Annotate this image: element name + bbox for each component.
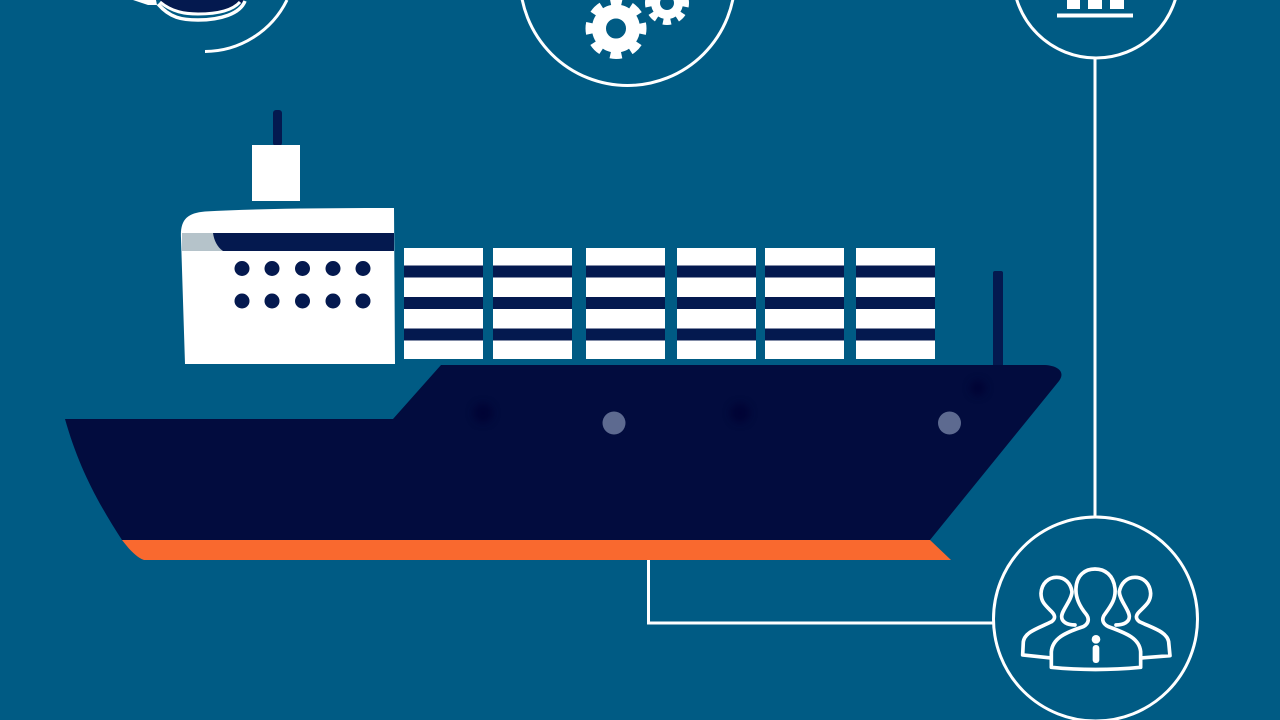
hull portholes bbox=[473, 380, 986, 434]
icon circle: bar chart bbox=[1013, 0, 1179, 58]
icon: top-left circle fragment bbox=[133, 0, 287, 52]
ring bbox=[1013, 0, 1179, 58]
icon circle: gears bbox=[520, 0, 735, 86]
connector: hull to people circle bbox=[648, 560, 994, 623]
stack 6 bbox=[856, 248, 935, 359]
hull bbox=[65, 365, 1061, 540]
left person bbox=[1023, 577, 1075, 658]
bow mast bbox=[993, 271, 1003, 367]
bowl outer outline bbox=[158, 1, 245, 20]
connector: chart circle to people circle bbox=[1094, 58, 1096, 517]
bowl inner outline bbox=[160, 2, 240, 14]
stack 3 bbox=[586, 248, 665, 359]
porthole dots bbox=[234, 261, 370, 308]
ring bbox=[520, 0, 735, 86]
gear body bbox=[656, 0, 678, 14]
small gear bbox=[649, 0, 685, 21]
stack 2 bbox=[493, 248, 572, 359]
bridge window strip, grey part bbox=[182, 233, 223, 251]
people icon bbox=[1023, 569, 1170, 669]
bridge body bbox=[181, 208, 395, 364]
center person bbox=[1051, 569, 1141, 669]
light porthole bbox=[938, 412, 961, 434]
gear teeth bbox=[590, 2, 642, 54]
icon circle: team bbox=[994, 517, 1198, 720]
left wedge bbox=[133, 0, 157, 5]
boot stripe bbox=[122, 540, 951, 560]
dark porthole shadows bbox=[473, 380, 986, 423]
bowl bbox=[160, 0, 244, 14]
gear body bbox=[599, 12, 633, 46]
aft mast bbox=[273, 110, 282, 146]
container stacks bbox=[404, 248, 935, 359]
funnel bbox=[252, 145, 300, 201]
stack 1 bbox=[404, 248, 483, 359]
gear teeth bbox=[649, 0, 685, 21]
stack 4 bbox=[677, 248, 756, 359]
arc bbox=[205, 0, 287, 52]
cargo ship bbox=[65, 110, 1061, 560]
bridge superstructure bbox=[181, 208, 395, 364]
chart baseline bbox=[1057, 14, 1133, 18]
light porthole bbox=[602, 412, 626, 434]
right person bbox=[1116, 577, 1170, 658]
large gear bbox=[590, 2, 642, 54]
stack 5 bbox=[765, 248, 844, 359]
bridge window strip, navy part bbox=[213, 233, 394, 251]
ring bbox=[994, 517, 1198, 720]
tie bbox=[1092, 635, 1100, 663]
bars bbox=[1067, 0, 1124, 9]
